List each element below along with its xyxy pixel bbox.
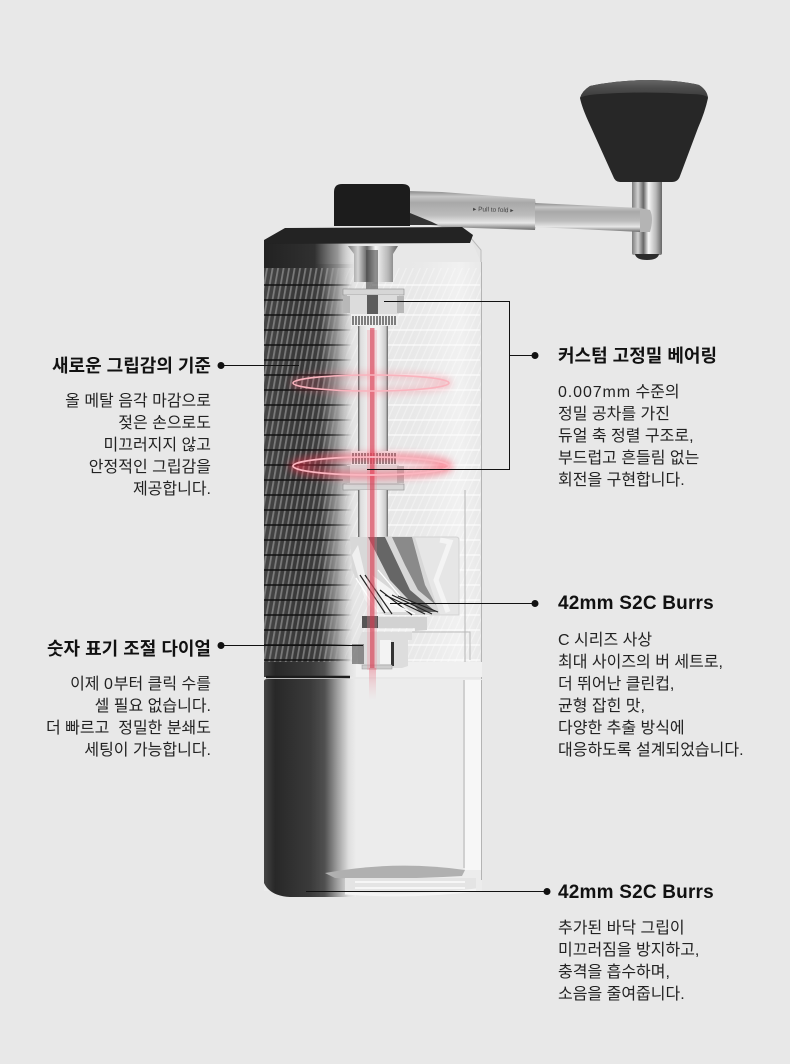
callout text: grip: 젖은 손으로도 [118, 415, 211, 432]
dial seat [358, 632, 412, 668]
handle shaft [632, 178, 662, 255]
callout text: burrs: 다양한 추출 방식에 [558, 720, 685, 737]
callout text: bearing: 정밀 공차를 가진 [558, 406, 670, 423]
callout text: dial: 이제 0부터 클릭 수를 [70, 676, 211, 693]
callout text: burrs: 최대 사이즈의 버 세트로, [558, 654, 723, 671]
callout heading: burrs: 42mm S2C Burrs [558, 593, 714, 614]
housing outline [385, 537, 459, 615]
arm shadow [410, 213, 438, 225]
crank handle [408, 80, 708, 260]
glass body [264, 262, 482, 676]
lower cage [351, 451, 398, 465]
knurl white right side [345, 268, 481, 662]
callout text: burrs: 대응하도록 설계되었습니다. [558, 742, 744, 759]
glass edge [465, 262, 482, 680]
burr assembly [350, 537, 470, 669]
callout text: grip [65, 392, 211, 498]
callout heading: base: 42mm S2C Burrs [558, 882, 714, 903]
leader: bearing [367, 302, 538, 470]
burr collar [362, 617, 427, 631]
callout text: base: 추가된 바닥 그립이 [558, 920, 685, 937]
lower shaft [358, 490, 388, 538]
arm label: ▸ Pull to fold ▸ [473, 206, 514, 214]
callout heading: grip: 새로운 그립감의 기준 [52, 356, 211, 376]
callout text: grip: 제공합니다. [133, 481, 211, 498]
callout text: burrs: C 시리즈 사상 [558, 632, 652, 649]
callout text: base: 미끄러짐을 방지하고, [558, 942, 699, 959]
jar glass edges [464, 680, 482, 880]
handle arm [408, 191, 537, 230]
knob [580, 80, 708, 182]
callout text: burrs [558, 632, 744, 759]
burr body [350, 537, 440, 615]
red ring upper [293, 375, 449, 391]
callout text: bearing: 부드럽고 흔들림 없는 [558, 450, 699, 467]
callout heading: bearing: 커스텀 고정밀 베어링 [558, 346, 717, 366]
callout text: grip: 미끄러지지 않고 [104, 437, 211, 454]
knob rim [580, 80, 708, 98]
foot cap [635, 254, 659, 260]
button [334, 184, 410, 226]
knurl rows [264, 285, 360, 660]
callout text: base: 충격을 흡수하며, [558, 964, 670, 981]
callout text: burrs: 더 뛰어난 클린컵, [558, 676, 674, 693]
illustration: coffee grinder cutaway [218, 80, 708, 897]
callout text: burrs: 균형 잡힌 맛, [558, 698, 645, 715]
red axis beam [367, 328, 377, 700]
callout text: base: 소음을 줄여줍니다. [558, 986, 685, 1003]
lower bearing [347, 465, 399, 485]
callout text: base [558, 920, 699, 1003]
jar base [325, 866, 465, 879]
grinder body [264, 237, 482, 897]
jar [264, 679, 482, 891]
lid [264, 227, 473, 244]
leader: burrs [390, 600, 538, 607]
callout text: dial: 셀 필요 없습니다. [95, 698, 211, 715]
lid skirt [264, 243, 356, 268]
leader: base [306, 888, 550, 895]
callout text: bearing: 회전을 구현합니다. [558, 472, 685, 489]
top cap and button [264, 184, 473, 268]
collar [264, 662, 482, 677]
callout text: bearing [558, 384, 699, 489]
callout text: dial: 더 빠르고 정밀한 분쇄도 [46, 720, 211, 737]
callout text: dial [46, 676, 211, 759]
shaft and bearings [343, 246, 404, 538]
callout text: grip: 안정적인 그립감을 [89, 459, 211, 476]
upper bushing [348, 246, 398, 282]
burr ridges [360, 575, 438, 615]
upper cage [351, 314, 398, 326]
callout text: bearing: 0.007mm 수준의 [558, 384, 680, 401]
callout text: bearing: 듀얼 축 정렬 구조로, [558, 428, 694, 445]
knurl dark left side [264, 264, 356, 662]
callout text: dial: 세팅이 가능합니다. [84, 742, 211, 759]
red ring lower [293, 457, 449, 475]
upper bearing [343, 289, 404, 295]
leader: dial [218, 642, 363, 649]
callout heading: dial: 숫자 표기 조절 다이얼 [47, 639, 211, 659]
leader: grip [218, 362, 299, 369]
callout text: grip: 올 메탈 음각 마감으로 [65, 393, 211, 410]
central shaft [358, 326, 388, 451]
